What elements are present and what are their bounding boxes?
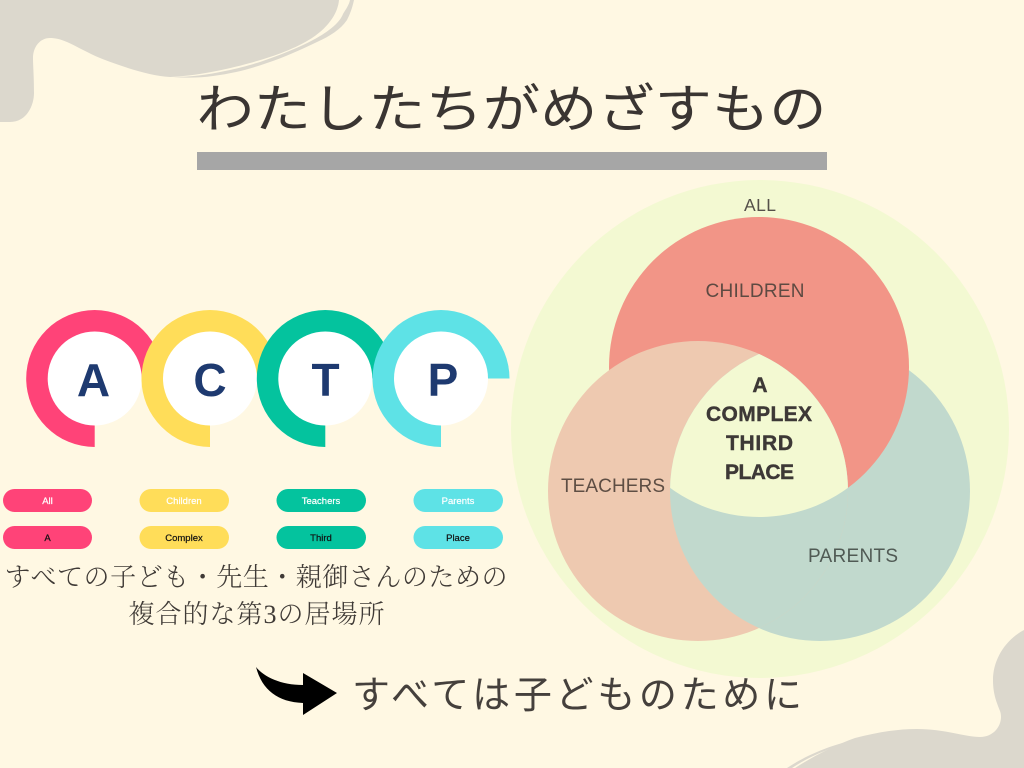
pill: parents: Parents bbox=[442, 496, 475, 507]
label: teachers: TEACHERS bbox=[561, 476, 665, 497]
pill: complex bbox=[140, 526, 229, 549]
ring P bbox=[372, 310, 510, 447]
pill: place bbox=[414, 526, 503, 549]
ring T bbox=[257, 310, 394, 447]
pill: children: Children bbox=[166, 496, 202, 507]
decorative blob: top left bbox=[0, 0, 354, 122]
circle: children bbox=[609, 217, 909, 517]
circle: teachers bbox=[548, 341, 848, 641]
title: わたしたちがめざすもの bbox=[196, 82, 826, 140]
venn diagram bbox=[511, 180, 1009, 678]
pill: all bbox=[3, 489, 92, 512]
japanese description bbox=[4, 563, 508, 629]
pill: complex: Complex bbox=[165, 533, 203, 544]
japanese description: 複合的な第3の居場所 bbox=[128, 600, 384, 629]
pill: a: A bbox=[44, 533, 51, 544]
pill: children bbox=[140, 489, 229, 512]
outer circle: all bbox=[511, 180, 1009, 678]
label: parents: PARENTS bbox=[808, 546, 898, 567]
pills: row 2 bbox=[3, 526, 503, 549]
overlap: centre third place bbox=[670, 354, 848, 517]
pill: a bbox=[3, 526, 92, 549]
circle: parents bbox=[670, 341, 970, 641]
label: children: CHILDREN bbox=[706, 281, 804, 302]
ring A bbox=[26, 310, 163, 447]
pills: row 1 bbox=[3, 489, 503, 512]
centre label bbox=[706, 374, 812, 484]
centre label: THIRD bbox=[726, 432, 793, 455]
ACTP ring logos bbox=[26, 310, 510, 447]
pill: teachers bbox=[276, 489, 366, 512]
pill: parents bbox=[414, 489, 503, 512]
centre label: A bbox=[752, 374, 768, 397]
centre label: COMPLEX bbox=[706, 403, 812, 426]
ring A: A bbox=[77, 354, 110, 406]
japanese description: すべての子ども・先生・親御さんのための bbox=[4, 563, 508, 592]
pill: place: Place bbox=[446, 533, 470, 544]
decorative blob: bottom right bbox=[787, 630, 1024, 768]
overlap: parents over teachers bbox=[670, 354, 848, 628]
label: all: ALL bbox=[744, 195, 776, 215]
icon: curved arrow bbox=[256, 667, 337, 715]
centre label: PLACE bbox=[725, 461, 794, 484]
pill: third bbox=[276, 526, 366, 549]
ring C: C bbox=[193, 354, 227, 406]
ring T: T bbox=[311, 354, 340, 406]
closing message: すべては子どものために bbox=[352, 675, 802, 717]
title underline bar bbox=[197, 152, 827, 170]
pill: teachers: Teachers bbox=[302, 496, 341, 507]
pill: third: Third bbox=[310, 533, 332, 544]
pill: all: All bbox=[42, 496, 53, 507]
ring C bbox=[142, 310, 278, 447]
ring P: P bbox=[428, 354, 458, 406]
